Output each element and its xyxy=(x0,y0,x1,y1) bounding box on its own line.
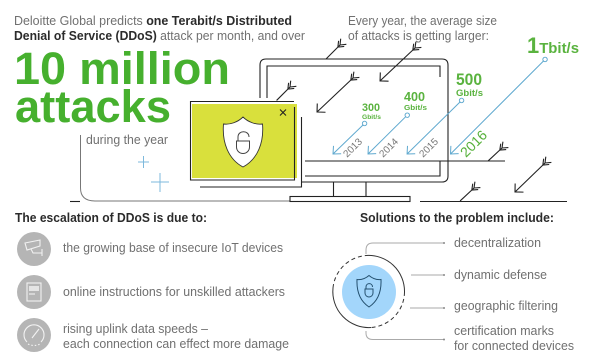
monitor xyxy=(70,59,567,202)
solution items: decentralization xyxy=(454,236,541,250)
attack arrows xyxy=(274,39,553,204)
label 1 Tbit/s: 1Tbit/s xyxy=(527,33,579,58)
heading: every year: of attacks is getting larger: xyxy=(348,29,489,43)
solutions heading: Solutions to the problem include: xyxy=(360,210,554,225)
label 300 Gbit/s xyxy=(362,102,381,121)
big headline: 10 million xyxy=(14,43,230,94)
label 400 Gbit/s: 400 xyxy=(404,89,425,104)
label 300 Gbit/s: Gbit/s xyxy=(362,114,381,121)
intro text: Deloitte Global predicts one Terabit/s Distributed xyxy=(14,14,292,28)
cause 1: the growing base of insecure IoT devices xyxy=(63,241,283,255)
solution items: certification marks xyxy=(454,324,554,338)
icon: shield with open padlock xyxy=(223,117,263,167)
shield badge xyxy=(333,255,405,328)
cause 3: each connection can effect more damage xyxy=(63,337,289,351)
year labels xyxy=(341,127,490,160)
intro text line 2: Denial of Service (DDoS) attack per month, and over xyxy=(14,29,305,43)
icon: close x xyxy=(280,110,286,116)
attack size arrows xyxy=(329,54,551,158)
plus signs xyxy=(138,156,169,192)
year labels: 2014 xyxy=(377,136,401,160)
cause 1 xyxy=(17,232,283,266)
solution items xyxy=(454,236,574,353)
label 500 Gbit/s: 500 xyxy=(456,70,482,89)
solutions connectors xyxy=(366,243,444,340)
big headline xyxy=(14,43,230,132)
solution items: for connected devices xyxy=(454,339,574,353)
cause 3: rising uplink data speeds – xyxy=(63,322,208,336)
cause 3 xyxy=(17,318,289,352)
solution items: geographic filtering xyxy=(454,299,558,313)
causes heading: The escalation of DDoS is due to: xyxy=(15,210,207,225)
cause 2 xyxy=(17,275,285,309)
label 300 Gbit/s: 300 xyxy=(362,102,380,114)
heading: every year: Every year, the average size xyxy=(348,14,497,28)
label 500 Gbit/s: Gbit/s xyxy=(456,88,483,98)
label 400 Gbit/s xyxy=(404,89,427,112)
grey bracket line xyxy=(80,135,290,201)
cause 2: online instructions for unskilled attackers xyxy=(63,285,285,299)
heading: every year xyxy=(348,14,497,43)
year labels: 2013 xyxy=(341,136,365,160)
during the year: during the year xyxy=(86,133,168,147)
security window xyxy=(190,102,297,180)
solution items: dynamic defense xyxy=(454,268,547,282)
big headline: attacks xyxy=(15,81,171,132)
year labels: 2015 xyxy=(417,136,441,160)
panel: solutions xyxy=(333,210,574,353)
connector dots xyxy=(443,242,445,340)
label 400 Gbit/s: Gbit/s xyxy=(404,103,427,112)
panel: causes xyxy=(15,210,289,352)
year labels: 2016 xyxy=(457,127,490,160)
label 500 Gbit/s xyxy=(456,70,483,98)
